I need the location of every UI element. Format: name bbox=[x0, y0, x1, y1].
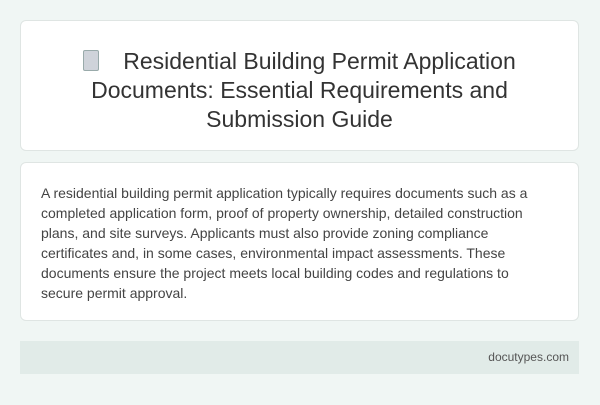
panel: description bbox=[20, 162, 579, 321]
panel: title card bbox=[20, 20, 579, 151]
footer text: docutypes.com bbox=[488, 350, 569, 364]
text block: A residential building permit application typically requires documents such as a completed application form, proof of property ownership, detailed construction plans, and site surveys. Applicants must also provide zoning compliance certificates and, in some cases, environmental impact assessments. These documents ensure the project meets local building codes and regulations to secure permit approval. bbox=[41, 185, 527, 301]
title: Residential Building Permit Application Documents: Essential Requirements and Submission Guide bbox=[91, 48, 516, 132]
footer bbox=[20, 341, 579, 374]
icon: document bbox=[83, 50, 99, 71]
